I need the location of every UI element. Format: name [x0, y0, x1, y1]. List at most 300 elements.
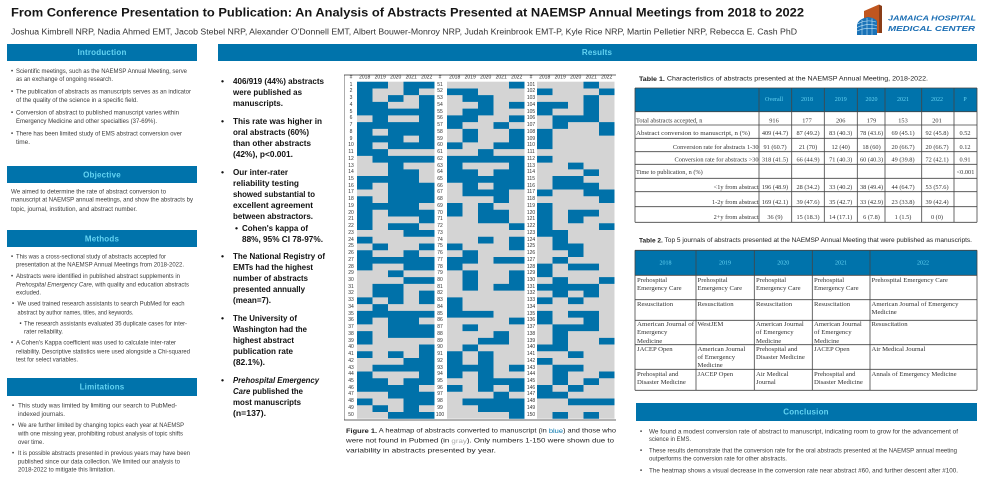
text block: results findings: presented annually [233, 284, 305, 294]
heatmap chart: abstracts 1-150 by year: 2022 [511, 74, 522, 80]
heading: limitations: Limitations [80, 382, 125, 392]
table 2: top 5 journals: Emergency Care [814, 285, 859, 292]
table 1: characteristics of abstracts [635, 88, 977, 222]
heatmap chart: abstracts 1-150 by year: 87 [437, 324, 443, 330]
table 1: characteristics of abstracts: 196 (48.9) [762, 184, 788, 191]
table 2: top 5 journals: Emergency Care [756, 285, 801, 292]
heatmap chart: abstracts 1-150 by year: 12 [348, 156, 354, 162]
table 1: characteristics of abstracts: 2019 [835, 97, 847, 103]
text block: introduction bullets: of the quality of the science in a specific field. [16, 98, 138, 104]
table 1: characteristics of abstracts: 44 (64.7) [891, 184, 915, 191]
heatmap chart: abstracts 1-150 by year: 148 [527, 398, 535, 404]
heatmap chart: abstracts 1-150 by year: 88 [437, 331, 443, 337]
heatmap chart: abstracts 1-150 by year: 86 [437, 317, 443, 323]
heatmap chart: abstracts 1-150 by year: 77 [437, 257, 443, 263]
heatmap chart: abstracts 1-150 by year: 55 [437, 109, 443, 115]
heading: methods [7, 230, 197, 247]
heatmap chart: abstracts 1-150 by year: 146 [527, 385, 535, 391]
table 1: characteristics of abstracts: 2018 [801, 97, 813, 103]
heatmap chart: abstracts 1-150 by year: 11 [348, 149, 354, 155]
table 1: characteristics of abstracts: 83 (40.3) [829, 130, 852, 137]
heatmap chart: abstracts 1-150 by year: 121 [527, 216, 535, 222]
table 1: characteristics of abstracts: 33 (40.2) [829, 184, 852, 191]
table 2: top 5 journals: 2022 [917, 260, 929, 266]
heatmap chart: abstracts 1-150 by year: 2019 [555, 74, 566, 80]
table 1: characteristics of abstracts: Conversion rate for abstracts 1-30 [673, 144, 758, 151]
heatmap chart: abstracts 1-150 by year: 94 [437, 371, 443, 377]
panel: objective [7, 166, 197, 213]
text block: results findings: The University of [233, 313, 297, 323]
text block: limitations bullets: • [12, 451, 14, 457]
heatmap chart: abstracts 1-150 by year: 53 [437, 95, 443, 101]
heatmap chart: abstracts 1-150 by year: 110 [527, 142, 535, 148]
heatmap chart: abstracts 1-150 by year: 2018 [539, 74, 550, 80]
heatmap chart: abstracts 1-150 by year: 99 [437, 405, 443, 411]
table 2: top 5 journals: Disaster Medicine [814, 379, 863, 386]
text block: results findings: Washington had the [233, 324, 307, 334]
heatmap chart: abstracts 1-150 by year: 124 [527, 237, 535, 243]
table 1: characteristics of abstracts: 2+y from abstract [714, 214, 759, 221]
table 2: top 5 journals: American Journal of [637, 321, 695, 328]
text block: limitations bullets: published since our data collection. We limited our analysis to [18, 460, 181, 466]
text block: introduction bullets [11, 69, 191, 146]
table 1: characteristics of abstracts: 18 (60) [862, 144, 881, 151]
text block: limitations bullets: It is possible abstracts presented in previous years may have been [18, 451, 190, 457]
table 2: top 5 journals: Medicine [872, 309, 897, 316]
heatmap chart: abstracts 1-150 by year: 7 [350, 122, 352, 128]
heatmap chart: abstracts 1-150 by year: 2019 [375, 74, 386, 80]
heatmap chart: abstracts 1-150 by year: 21 [348, 216, 354, 222]
table 1: characteristics of abstracts: P [963, 97, 967, 103]
text block: results findings [221, 76, 325, 418]
table 1: characteristics of abstracts: <1y from abstract [714, 184, 759, 191]
table 1: characteristics of abstracts: 153 [898, 118, 908, 124]
text block: limitations bullets [12, 404, 190, 474]
table 2: top 5 journals: Prehospital and [814, 371, 856, 378]
text block: introduction bullets: There has been limited study of EMS abstract conversion over [16, 132, 182, 138]
text block: methods bullets: • [11, 340, 13, 346]
table 1: characteristics of abstracts: 2020 [866, 97, 878, 103]
heatmap chart: abstracts 1-150 by year: 81 [437, 284, 443, 290]
table 1: characteristics of abstracts: 66 (44.9) [796, 156, 820, 164]
heatmap chart: abstracts 1-150 by year: 130 [527, 277, 535, 283]
heatmap chart: abstracts 1-150 by year: 15 [348, 176, 354, 182]
authors: Joshua Kimbrell NRP, Nadia Ahmed EMT, Jacob Stebel NRP, Alexander O'Donnell EMT, Albert Bouwer-Monroy NRP, Judah Kreinbrook EMT-P, Kyle Rice NRP, Martin Pelletier NRP, Rebecca E. Cash PhD [11, 28, 797, 36]
table 1: characteristics of abstracts: 21 (70) [799, 144, 817, 151]
table 2: top 5 journals: of Emergency [698, 354, 736, 361]
text block: results findings: (n=137). [233, 408, 266, 418]
table 2: top 5 journals: Prehospital and [756, 346, 798, 353]
table 2: top 5 journals: Disaster Medicine [756, 354, 805, 361]
heatmap chart: abstracts 1-150 by year: 132 [527, 290, 535, 296]
heatmap chart: abstracts 1-150 by year: 25 [348, 243, 354, 249]
heatmap chart: abstracts 1-150 by year: 40 [348, 344, 354, 350]
text block: objective: manuscript at NAEMSP annual meetings, and show the abstracts by [11, 198, 193, 204]
table 1 caption: Table 1. Characteristics of abstracts presented at the NAEMSP Annual Meeting, 2018-2022. [639, 76, 928, 82]
table 2: top 5 journals: Prehospital [637, 277, 667, 284]
text block: results findings: excellent agreement [233, 200, 313, 210]
heatmap chart: abstracts 1-150 by year: 96 [437, 385, 443, 391]
heatmap chart: abstracts 1-150 by year [344, 74, 616, 420]
text block: results findings: (42%), p<0.001. [233, 149, 293, 159]
heatmap chart: abstracts 1-150 by year: 1 [350, 82, 352, 88]
text block: methods bullets: • [20, 322, 22, 328]
heatmap chart: abstracts 1-150 by year: 39 [348, 338, 354, 344]
heatmap chart: abstracts 1-150 by year: 123 [527, 230, 535, 236]
text block: results findings: most manuscripts [233, 397, 301, 407]
table 2: top 5 journals: Air Medical Journal [872, 346, 925, 353]
table 2: top 5 journals: Emergency Care [698, 285, 742, 292]
heatmap chart: abstracts 1-150 by year: 37 [348, 324, 354, 330]
heatmap chart: abstracts 1-150 by year: 54 [437, 102, 443, 108]
heatmap chart: abstracts 1-150 by year: 102 [527, 88, 535, 94]
heatmap chart: abstracts 1-150 by year: 147 [527, 391, 535, 397]
heatmap chart: abstracts 1-150 by year: 107 [527, 122, 535, 128]
heatmap chart: abstracts 1-150 by year: 65 [437, 176, 443, 182]
heatmap chart: abstracts 1-150 by year: 85 [437, 311, 443, 317]
table 2: top 5 journals: Prehospital Emergency Care [872, 277, 948, 284]
panel: limitations [7, 378, 197, 474]
table 1: characteristics of abstracts: Total abstracts accepted, n [636, 118, 703, 124]
heatmap chart: abstracts 1-150 by year: 79 [437, 270, 443, 276]
heatmap chart: abstracts 1-150 by year: 120 [527, 210, 535, 216]
table 2: top 5 journals: Resuscitation [872, 321, 908, 328]
table 1: characteristics of abstracts: 69 (45.1) [891, 130, 915, 137]
heatmap chart: abstracts 1-150 by year: 144 [527, 371, 535, 377]
table 1: characteristics of abstracts: 12 (40) [832, 144, 850, 151]
heatmap chart: abstracts 1-150 by year: 122 [527, 223, 535, 229]
heatmap chart: abstracts 1-150 by year: 105 [527, 109, 535, 115]
text block: methods bullets [11, 254, 190, 364]
text block: methods bullets: This was a cross-sectional study of abstracts accepted for [16, 254, 166, 260]
heatmap chart: abstracts 1-150 by year: 57 [437, 122, 443, 128]
table 1: characteristics of abstracts: 36 (9) [767, 214, 783, 221]
heading: objective: Objective [83, 170, 121, 180]
heading: introduction [7, 44, 197, 61]
logo: Jamaica Hospital Medical Center [857, 4, 976, 35]
heatmap chart: abstracts 1-150 by year: 26 [348, 250, 354, 256]
heatmap chart: abstracts 1-150 by year: 2021 [496, 74, 507, 80]
heatmap chart: abstracts 1-150 by year: 76 [437, 250, 443, 256]
text block: methods bullets: abstract by author names, titles, and keywords. [18, 310, 134, 316]
table 1: characteristics of abstracts: 33 (42.9) [860, 199, 883, 206]
table 1: characteristics of abstracts: <0.001 [957, 169, 974, 176]
text block: results findings: oral abstracts (60%) [233, 127, 309, 137]
text block: methods bullets: presentation at the NAEMSP Annual Meetings from 2018-2022. [16, 262, 184, 268]
heatmap chart: abstracts 1-150 by year: 138 [527, 331, 535, 337]
heatmap chart: abstracts 1-150 by year: 28 [348, 264, 354, 270]
heading: conclusion: Conclusion [783, 408, 829, 416]
table 1: characteristics of abstracts: 14 (17.1) [829, 214, 852, 221]
heatmap chart: abstracts 1-150 by year: 46 [348, 385, 354, 391]
heatmap chart: abstracts 1-150 by year: 10 [348, 142, 354, 148]
heatmap chart: abstracts 1-150 by year: 6 [350, 115, 352, 121]
heatmap chart: abstracts 1-150 by year: 35 [348, 311, 354, 317]
table 2: top 5 journals: Disaster Medicine [637, 379, 686, 386]
heatmap chart: abstracts 1-150 by year: 149 [527, 405, 535, 411]
heatmap chart: abstracts 1-150 by year: 150 [527, 412, 535, 418]
heatmap chart: abstracts 1-150 by year: 49 [348, 405, 354, 411]
text block: results findings: highest abstract [233, 335, 294, 345]
text block: limitations bullets: • [12, 423, 14, 429]
table 1: characteristics of abstracts: 0.12 [959, 144, 971, 151]
heatmap chart: abstracts 1-150 by year: 119 [527, 203, 535, 209]
table 1: characteristics of abstracts: 39 (42.4) [925, 199, 949, 206]
table 1: characteristics of abstracts: 1 (1.5) [895, 214, 911, 221]
heatmap chart: abstracts 1-150 by year: 16 [348, 183, 354, 189]
heatmap chart: abstracts 1-150 by year: 44 [348, 371, 354, 377]
table 1: characteristics of abstracts: Time to publication, n (%) [636, 169, 703, 176]
text block: results findings: between abstractors. [233, 211, 313, 221]
table 1: characteristics of abstracts: 2021 [897, 97, 909, 103]
text block: limitations bullets: with one missing year, prohibiting robust analysis of topic shifts [17, 432, 183, 438]
heatmap chart: abstracts 1-150 by year: 2020 [390, 74, 401, 80]
text block: results findings: than other abstracts [233, 138, 311, 148]
table 2: top 5 journals: Medicine [637, 338, 662, 345]
text block: methods bullets: • [12, 302, 14, 308]
table 1: characteristics of abstracts: 38 (49.4) [860, 184, 883, 191]
text block: results findings: (82.1%). [233, 357, 265, 367]
heatmap chart: abstracts 1-150 by year: 97 [437, 391, 443, 397]
heatmap chart: abstracts 1-150 by year: 48 [348, 398, 354, 404]
table 2: top 5 journals: Emergency [637, 329, 668, 336]
heatmap chart: abstracts 1-150 by year: 103 [527, 95, 535, 101]
text block: methods bullets: We used trained research assistants to search PubMed for each [18, 302, 184, 308]
table 1: characteristics of abstracts: 60 (40.3) [860, 156, 883, 164]
heatmap chart: abstracts 1-150 by year: 2 [350, 88, 352, 94]
table 2: top 5 journals [635, 250, 977, 390]
text block: results findings: • [221, 116, 224, 126]
text block: conclusion bullets: We found a modest conversion rate of abstract to manuscript, indicating room to grow for the advancement of [649, 429, 958, 435]
heatmap chart: abstracts 1-150 by year: 145 [527, 378, 535, 384]
heading: conclusion [636, 403, 977, 421]
heatmap chart: abstracts 1-150 by year: 2021 [586, 74, 597, 80]
table 2: top 5 journals: 2021 [835, 260, 847, 266]
table 2: top 5 journals: Medicine [698, 362, 723, 369]
table 2: top 5 journals: Journal [756, 379, 776, 386]
heatmap chart: abstracts 1-150 by year: 2021 [406, 74, 417, 80]
text block: results findings: • [221, 167, 224, 177]
text block: results findings: • [221, 251, 224, 261]
text block: results findings: Prehospital Emergency [233, 375, 320, 385]
table 2: top 5 journals: of Emergency [756, 329, 794, 336]
table 2: top 5 journals: WestJEM [698, 321, 723, 328]
text block: methods bullets: test for select variables. [16, 358, 78, 364]
heading: results [218, 44, 977, 61]
table 1: characteristics of abstracts: 179 [867, 118, 876, 124]
heatmap chart: abstracts 1-150 by year: 58 [437, 129, 443, 135]
heatmap chart: abstracts 1-150 by year: 9 [350, 136, 352, 142]
logo: Jamaica Hospital Medical Center: MEDICAL CENTER [888, 24, 976, 33]
heatmap chart: abstracts 1-150 by year: 52 [437, 88, 443, 94]
table 2: top 5 journals: Resuscitation [698, 301, 734, 308]
table 2: top 5 journals: JACEP Open [698, 371, 734, 378]
heatmap chart: abstracts 1-150 by year: 34 [348, 304, 354, 310]
table 1: characteristics of abstracts: 87 (49.2) [796, 130, 820, 137]
heatmap chart: abstracts 1-150 by year: 2019 [465, 74, 476, 80]
heatmap chart: abstracts 1-150 by year: 4 [350, 102, 352, 108]
heatmap chart: abstracts 1-150 by year: 117 [527, 189, 535, 195]
heatmap chart: abstracts 1-150 by year: 27 [348, 257, 354, 263]
text block: results findings: (mean=7). [233, 295, 271, 305]
heatmap chart: abstracts 1-150 by year: 104 [527, 102, 535, 108]
heatmap chart: abstracts 1-150 by year: 63 [437, 162, 443, 168]
text block: conclusion bullets: science in EMS. [649, 437, 691, 443]
heatmap chart: abstracts 1-150 by year: 3 [350, 95, 352, 101]
heatmap chart: abstracts 1-150 by year: 23 [348, 230, 354, 236]
table 1: characteristics of abstracts: 206 [836, 118, 845, 124]
table 2: top 5 journals: JACEP Open [814, 346, 850, 353]
text block: introduction bullets: The publication of abstracts as manuscripts serves as an indicator [16, 90, 191, 96]
text block: conclusion bullets: The heatmap shows a visual decrease in the conversion rate near abstract #60, and further descent after #100. [649, 468, 958, 474]
heatmap chart: abstracts 1-150 by year: 60 [437, 142, 443, 148]
heatmap chart: abstracts 1-150 by year: 106 [527, 115, 535, 121]
heatmap chart: abstracts 1-150 by year: 111 [527, 149, 535, 155]
table 2: top 5 journals: Medicine [756, 338, 781, 345]
heatmap chart: abstracts 1-150 by year: 29 [348, 270, 354, 276]
heatmap chart: abstracts 1-150 by year: 74 [437, 237, 443, 243]
heatmap chart: abstracts 1-150 by year: 47 [348, 391, 354, 397]
table 1: characteristics of abstracts: 23 (33.8) [891, 199, 915, 206]
text block: objective [11, 190, 193, 213]
table 2: top 5 journals: Air Medical [756, 371, 789, 378]
text block: methods bullets: A Cohen's Kappa coefficient was used to calculate inter-rater [16, 340, 176, 346]
heatmap chart: abstracts 1-150 by year: 108 [527, 129, 535, 135]
heatmap chart: abstracts 1-150 by year: 89 [437, 338, 443, 344]
figure caption: Figure 1. A heatmap of abstracts converted to manuscript (in blue) and those who [346, 428, 616, 434]
heatmap chart: abstracts 1-150 by year: 133 [527, 297, 535, 303]
table 2: top 5 journals: Prehospital and [637, 371, 679, 378]
heatmap chart: abstracts 1-150 by year: 137 [527, 324, 535, 330]
table 2: top 5 journals: JACEP Open [637, 346, 673, 353]
text block: results findings: reliability testing [233, 178, 299, 188]
text block: conclusion bullets: • [640, 429, 642, 435]
table 1: characteristics of abstracts: 318 (41.5) [762, 156, 788, 164]
heatmap chart: abstracts 1-150 by year: 17 [348, 189, 354, 195]
heatmap chart: abstracts 1-150 by year: 92 [437, 358, 443, 364]
table 1: characteristics of abstracts: 49 (39.8) [891, 156, 915, 164]
heatmap chart: abstracts 1-150 by year: 95 [437, 378, 443, 384]
table 2: top 5 journals: Resuscitation [756, 301, 793, 308]
text block: results findings: • [235, 223, 238, 233]
table 2: top 5 journals: Prehospital [814, 277, 844, 284]
heatmap chart: abstracts 1-150 by year: 33 [348, 297, 354, 303]
table 1: characteristics of abstracts: 201 [932, 118, 942, 124]
table 1: characteristics of abstracts: 0 (0) [931, 214, 943, 221]
heatmap chart: abstracts 1-150 by year: 56 [437, 115, 443, 121]
table 2: top 5 journals: of Emergency [814, 329, 852, 336]
table 1: characteristics of abstracts: Conversion rate for abstracts >30 [674, 156, 758, 164]
table 1: characteristics of abstracts: 20 (66.7) [925, 144, 949, 151]
heatmap chart: abstracts 1-150 by year: 142 [527, 358, 535, 364]
text block: methods bullets: • [11, 274, 13, 280]
heatmap chart: abstracts 1-150 by year: 31 [348, 284, 354, 290]
heatmap chart: abstracts 1-150 by year: 100 [436, 412, 444, 418]
heatmap chart: abstracts 1-150 by year: 67 [437, 189, 443, 195]
text block: introduction bullets: Emergency Medicine and other specialties (37-69%). [16, 119, 157, 125]
text block: introduction bullets: • [11, 132, 13, 138]
table 1: characteristics of abstracts: 53 (57.6) [925, 184, 949, 191]
heatmap chart: abstracts 1-150 by year: 135 [527, 311, 535, 317]
heatmap chart: abstracts 1-150 by year: 109 [527, 136, 535, 142]
heatmap chart: abstracts 1-150 by year: 90 [437, 344, 443, 350]
heatmap chart: abstracts 1-150 by year: 18 [348, 196, 354, 202]
figure caption: variability in abstracts presented by year. [346, 448, 496, 454]
table 1: characteristics of abstracts: 71 (40.3) [829, 156, 852, 164]
text block: limitations bullets: indexed journals. [18, 412, 65, 418]
heatmap chart: abstracts 1-150 by year: 126 [527, 250, 535, 256]
table 1: characteristics of abstracts: Abstract conversion to manuscript, n (%) [636, 130, 750, 137]
text block: methods bullets: excluded. [16, 290, 41, 296]
heatmap chart: abstracts 1-150 by year: 84 [437, 304, 443, 310]
table 2: top 5 journals: American Journal [756, 321, 804, 328]
heatmap chart: abstracts 1-150 by year: 131 [527, 284, 535, 290]
heatmap chart: abstracts 1-150 by year: 116 [527, 183, 535, 189]
heatmap chart: abstracts 1-150 by year: 2022 [421, 74, 432, 80]
text block: results findings: This rate was higher in [233, 116, 322, 126]
heatmap chart: abstracts 1-150 by year: 98 [437, 398, 443, 404]
text block: results findings: publication rate [233, 346, 293, 356]
table 2: top 5 journals: Prehospital [698, 277, 728, 284]
heatmap chart: abstracts 1-150 by year: 64 [437, 169, 443, 175]
heatmap chart: abstracts 1-150 by year: 20 [348, 210, 354, 216]
table 1: characteristics of abstracts: 72 (42.1) [925, 156, 949, 164]
table 2: top 5 journals: Resuscitation [814, 301, 851, 308]
heatmap chart: abstracts 1-150 by year: 136 [527, 317, 535, 323]
heatmap chart: abstracts 1-150 by year: 42 [348, 358, 354, 364]
heatmap chart: abstracts 1-150 by year: 140 [527, 344, 535, 350]
table 1: characteristics of abstracts: 409 (44.7) [762, 130, 788, 137]
heatmap chart: abstracts 1-150 by year: 24 [348, 237, 354, 243]
heading: limitations [7, 378, 197, 396]
table 1: characteristics of abstracts: 916 [769, 118, 779, 124]
heatmap chart: abstracts 1-150 by year: 30 [348, 277, 354, 283]
heatmap chart: abstracts 1-150 by year: 2018 [449, 74, 460, 80]
text block: results findings: Cohen's kappa of [242, 223, 308, 233]
table 1: characteristics of abstracts: 78 (43.6) [860, 130, 883, 137]
heatmap chart: abstracts 1-150 by year: 72 [437, 223, 443, 229]
heatmap chart: abstracts 1-150 by year: 125 [527, 243, 535, 249]
table 2: top 5 journals: Annals of Emergency Medicine [872, 371, 957, 378]
heatmap chart: abstracts 1-150 by year: 8 [350, 129, 352, 135]
panel: conclusion [636, 403, 977, 474]
table 2: top 5 journals: 2018 [660, 260, 672, 266]
text block: results findings: Our inter-rater [233, 167, 289, 177]
heatmap chart: abstracts 1-150 by year: # [350, 74, 353, 80]
table 2: top 5 journals: Prehospital [756, 277, 786, 284]
heatmap chart: abstracts 1-150 by year: 68 [437, 196, 443, 202]
table 1: characteristics of abstracts: 1-2y from abstract [712, 199, 759, 206]
heatmap chart: abstracts 1-150 by year: 61 [437, 149, 443, 155]
text block: limitations bullets: This study was limited by limiting our search to PubMed- [18, 404, 177, 410]
heatmap chart: abstracts 1-150 by year: 66 [437, 183, 443, 189]
text block: results findings: manuscripts. [233, 98, 283, 108]
text block: objective: We aimed to determine the rate of abstract conversion to [11, 190, 167, 196]
text block: methods bullets: • [11, 254, 13, 260]
text block: introduction bullets: • [11, 90, 13, 96]
panel: methods [7, 230, 197, 364]
table 2: top 5 journals: Resuscitation [637, 301, 674, 308]
heatmap chart: abstracts 1-150 by year: 93 [437, 365, 443, 371]
table 2: top 5 journals: American Journal of Emergency [872, 301, 959, 308]
text block: introduction bullets: time. [16, 140, 30, 146]
text block: limitations bullets: • [12, 404, 14, 410]
heatmap chart: abstracts 1-150 by year: 69 [437, 203, 443, 209]
table 1: characteristics of abstracts: 6 (7.8) [863, 214, 880, 221]
heatmap chart: abstracts 1-150 by year: 139 [527, 338, 535, 344]
text block: limitations bullets: We are further limited by changing topics each year at NAEMSP [18, 423, 184, 429]
heading: objective [7, 166, 197, 183]
